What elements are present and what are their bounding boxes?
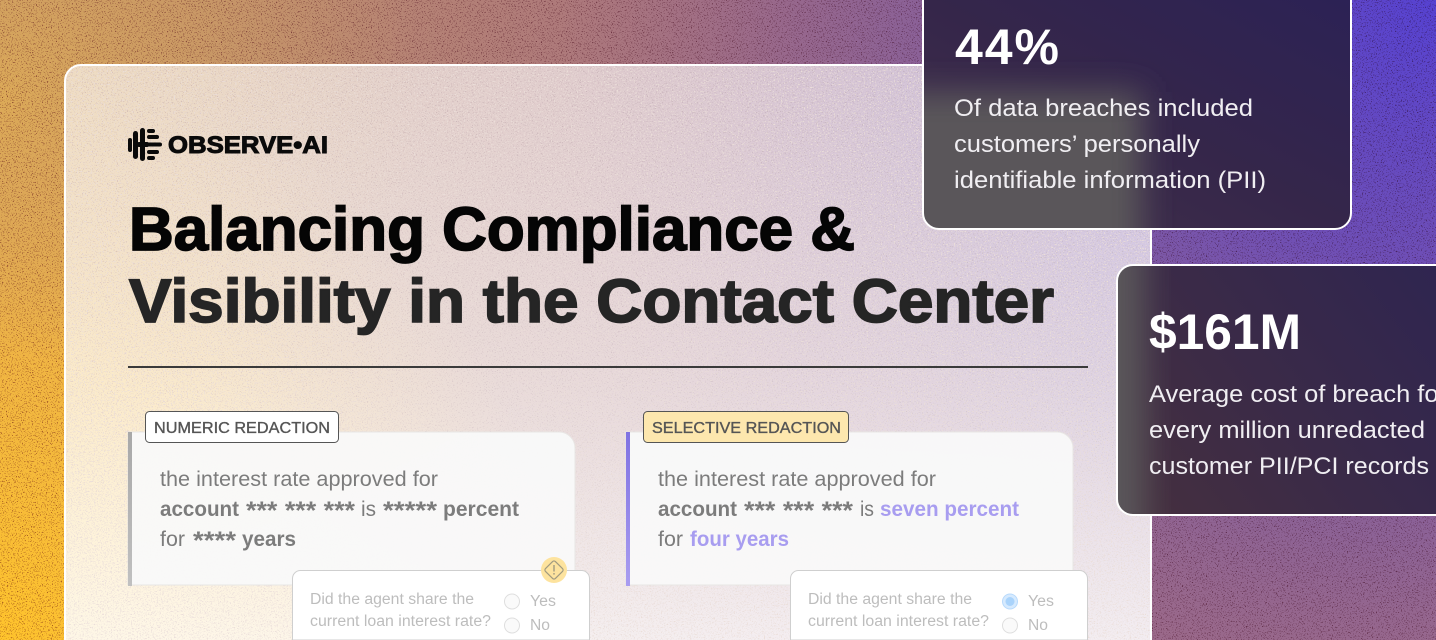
partially redacted transcript text: four years xyxy=(690,528,789,551)
stat card: $161M xyxy=(1116,264,1436,516)
radio options xyxy=(1002,593,1054,634)
badge: numeric redaction: NUMERIC REDACTION xyxy=(154,420,330,437)
partially redacted transcript text: *** *** *** xyxy=(744,497,853,525)
panel accent bar xyxy=(626,432,630,586)
redacted transcript text: is xyxy=(361,498,376,521)
title: Balancing Compliance & xyxy=(129,195,855,263)
panel: numeric redaction question card xyxy=(292,557,590,640)
redacted transcript text: for xyxy=(160,528,185,551)
stat number: 44% xyxy=(955,19,1059,75)
badge: selective redaction: SELECTIVE REDACTION xyxy=(652,420,841,437)
stat card: 44% xyxy=(922,0,1352,230)
stat description: customers’ personally xyxy=(954,131,1201,158)
panel: selective redaction question card xyxy=(790,570,1088,640)
stat description: Average cost of breach for xyxy=(1149,381,1436,408)
icon: warning diamond xyxy=(541,557,567,583)
stat description xyxy=(1149,381,1436,480)
logo: Observe.AI xyxy=(128,128,328,161)
stat description: customer PII/PCI records xyxy=(1149,453,1429,480)
partially redacted transcript text: for xyxy=(658,528,683,551)
partially redacted transcript text: the interest rate approved for xyxy=(658,468,936,491)
redacted transcript text: years xyxy=(242,528,296,551)
panel: selective redaction xyxy=(626,412,1073,586)
redacted transcript text: percent xyxy=(443,498,519,521)
question text xyxy=(310,591,491,630)
redacted transcript text: ***** xyxy=(383,497,437,525)
partially redacted transcript text: seven percent xyxy=(880,498,1019,521)
radio options: Yes xyxy=(1028,593,1054,610)
stat description xyxy=(954,95,1266,194)
radio options: Yes xyxy=(530,593,556,610)
redacted transcript text: **** xyxy=(193,527,236,555)
redacted transcript text: *** *** *** xyxy=(246,497,355,525)
question text: current loan interest rate? xyxy=(310,613,491,630)
question text xyxy=(808,591,989,630)
partially redacted transcript text xyxy=(658,468,1019,551)
redacted transcript text xyxy=(160,468,519,555)
question text: current loan interest rate? xyxy=(808,613,989,630)
partially redacted transcript text: account xyxy=(658,498,737,521)
redacted transcript text: account xyxy=(160,498,239,521)
panel background xyxy=(128,432,575,585)
title: Visibility in the Contact Center xyxy=(129,267,1054,335)
badge: numeric redaction xyxy=(146,412,338,442)
stat number: $161M xyxy=(1149,304,1301,360)
stat description: identifiable information (PII) xyxy=(954,167,1266,194)
redacted transcript text: the interest rate approved for xyxy=(160,468,438,491)
logo wordmark: OBSERVE•AI xyxy=(168,132,328,159)
question text: Did the agent share the xyxy=(808,591,972,608)
panel: main frosted card xyxy=(65,65,1151,640)
badge: selective redaction xyxy=(644,412,848,442)
partially redacted transcript text: is xyxy=(860,498,874,521)
radio options xyxy=(504,593,556,634)
card background xyxy=(924,0,1350,228)
icon: logo mark xyxy=(128,128,162,161)
question text: Did the agent share the xyxy=(310,591,474,608)
card background xyxy=(1118,266,1436,514)
radio options: No xyxy=(530,617,550,634)
radio options: No xyxy=(1028,617,1048,634)
stat description: every million unredacted xyxy=(1149,417,1425,444)
stat description: Of data breaches included xyxy=(954,95,1253,122)
panel: numeric redaction xyxy=(128,412,575,586)
panel accent bar xyxy=(128,432,132,586)
panel background xyxy=(626,432,1073,585)
title xyxy=(129,195,1054,335)
